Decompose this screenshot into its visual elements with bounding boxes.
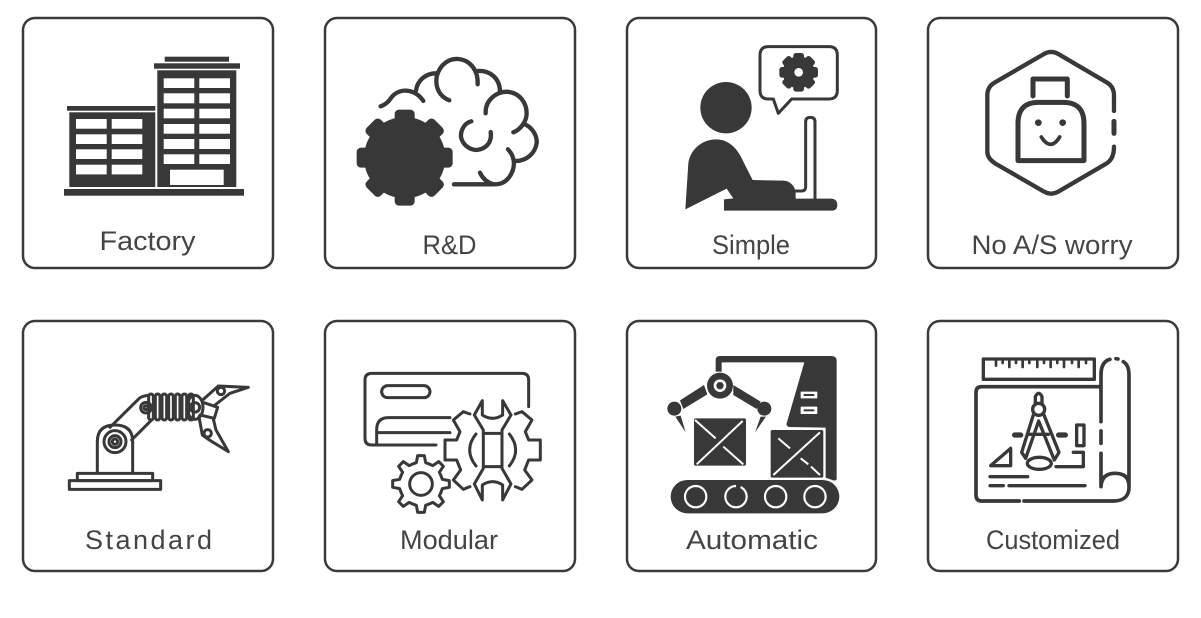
panel: Simple [627,18,876,268]
icon: factory buildings [64,57,244,196]
panel: Factory [23,18,273,268]
icon: robot arm [69,386,248,489]
label: Factory: Factory [100,226,196,256]
panel: No A/S worry [928,18,1178,268]
label: Modular: Modular [400,525,498,555]
icon: unit with gears and wrench [365,373,540,512]
panel: Modular [325,321,575,571]
icon: conveyor with robot arm [667,356,839,513]
label: Simple: Simple [712,230,790,260]
panel: Automatic [627,321,876,571]
label: R&D: R&D [422,230,476,260]
panel: Customized [928,321,1178,571]
label: No A/S worry: No A/S worry [972,230,1133,260]
panel: R&D [325,18,575,268]
panel: Standard [23,321,273,571]
label: Standard: Standard [85,525,212,555]
icon: blueprint with ruler and compass [976,359,1129,501]
label: Customized: Customized [986,525,1120,555]
icon: person at laptop [685,47,837,211]
label: Automatic: Automatic [686,525,818,555]
icon: smiling bag in hexagon [987,52,1114,194]
icon: brain and gear [357,59,537,206]
